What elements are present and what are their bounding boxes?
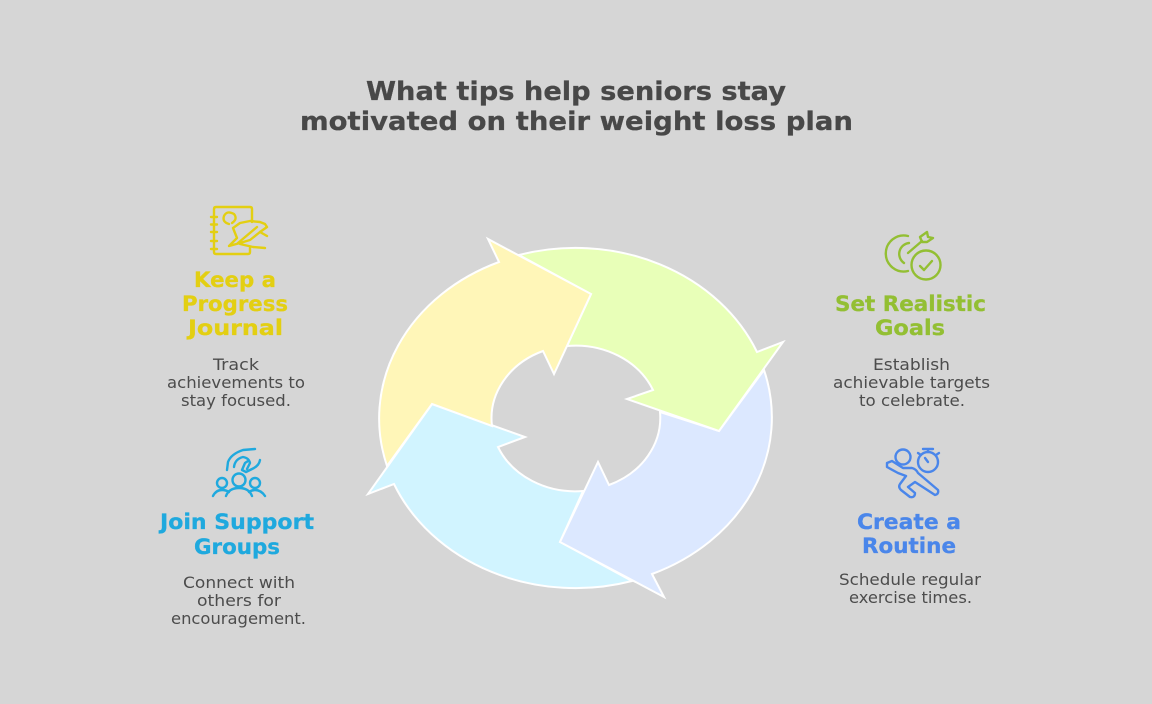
description: stay focused. (181, 391, 291, 410)
heading: Progress (182, 292, 288, 316)
arrow: create a routine (560, 370, 772, 597)
description (167, 355, 305, 410)
description: Track (212, 355, 260, 374)
title (300, 77, 853, 137)
description: encouragement. (171, 609, 306, 628)
arrow: set realistic goals (519, 248, 783, 431)
description (839, 570, 981, 607)
heading: Groups (194, 535, 280, 559)
heading: Goals (875, 316, 945, 340)
icon: runner with stopwatch (887, 449, 939, 497)
icon: journal and pen (211, 207, 267, 254)
panel: create a routine (839, 449, 981, 607)
heading (158, 510, 314, 559)
heading: Set Realistic (835, 292, 986, 316)
panel: join support groups (158, 449, 314, 628)
heading (835, 292, 986, 340)
arrow: support groups (368, 404, 632, 588)
heading (857, 510, 961, 558)
icon: target with arrow and check (886, 232, 940, 280)
description: others for (197, 591, 281, 610)
title: motivated on their weight loss plan (300, 107, 853, 137)
title: What tips help seniors stay (366, 77, 786, 107)
cycle diagram (368, 239, 783, 597)
description (171, 573, 306, 628)
description: Schedule regular (839, 570, 981, 589)
heading: Create a (857, 510, 961, 534)
description: achievable targets (833, 373, 990, 392)
panel: keep a progress journal (167, 207, 305, 410)
heading: Join Support (158, 510, 314, 534)
arrow: keep a progress journal (379, 239, 591, 466)
heading (182, 268, 288, 340)
description: achievements to (167, 373, 305, 392)
heading: Keep a (194, 268, 276, 292)
panel: set realistic goals (833, 232, 990, 410)
heading: Routine (862, 534, 956, 558)
description: Establish (873, 355, 950, 374)
description: Connect with (183, 573, 295, 592)
description: exercise times. (849, 588, 972, 607)
heading: Journal (186, 316, 283, 340)
description: to celebrate. (859, 391, 965, 410)
description (833, 355, 990, 410)
icon: group with supporting hand (213, 449, 265, 496)
